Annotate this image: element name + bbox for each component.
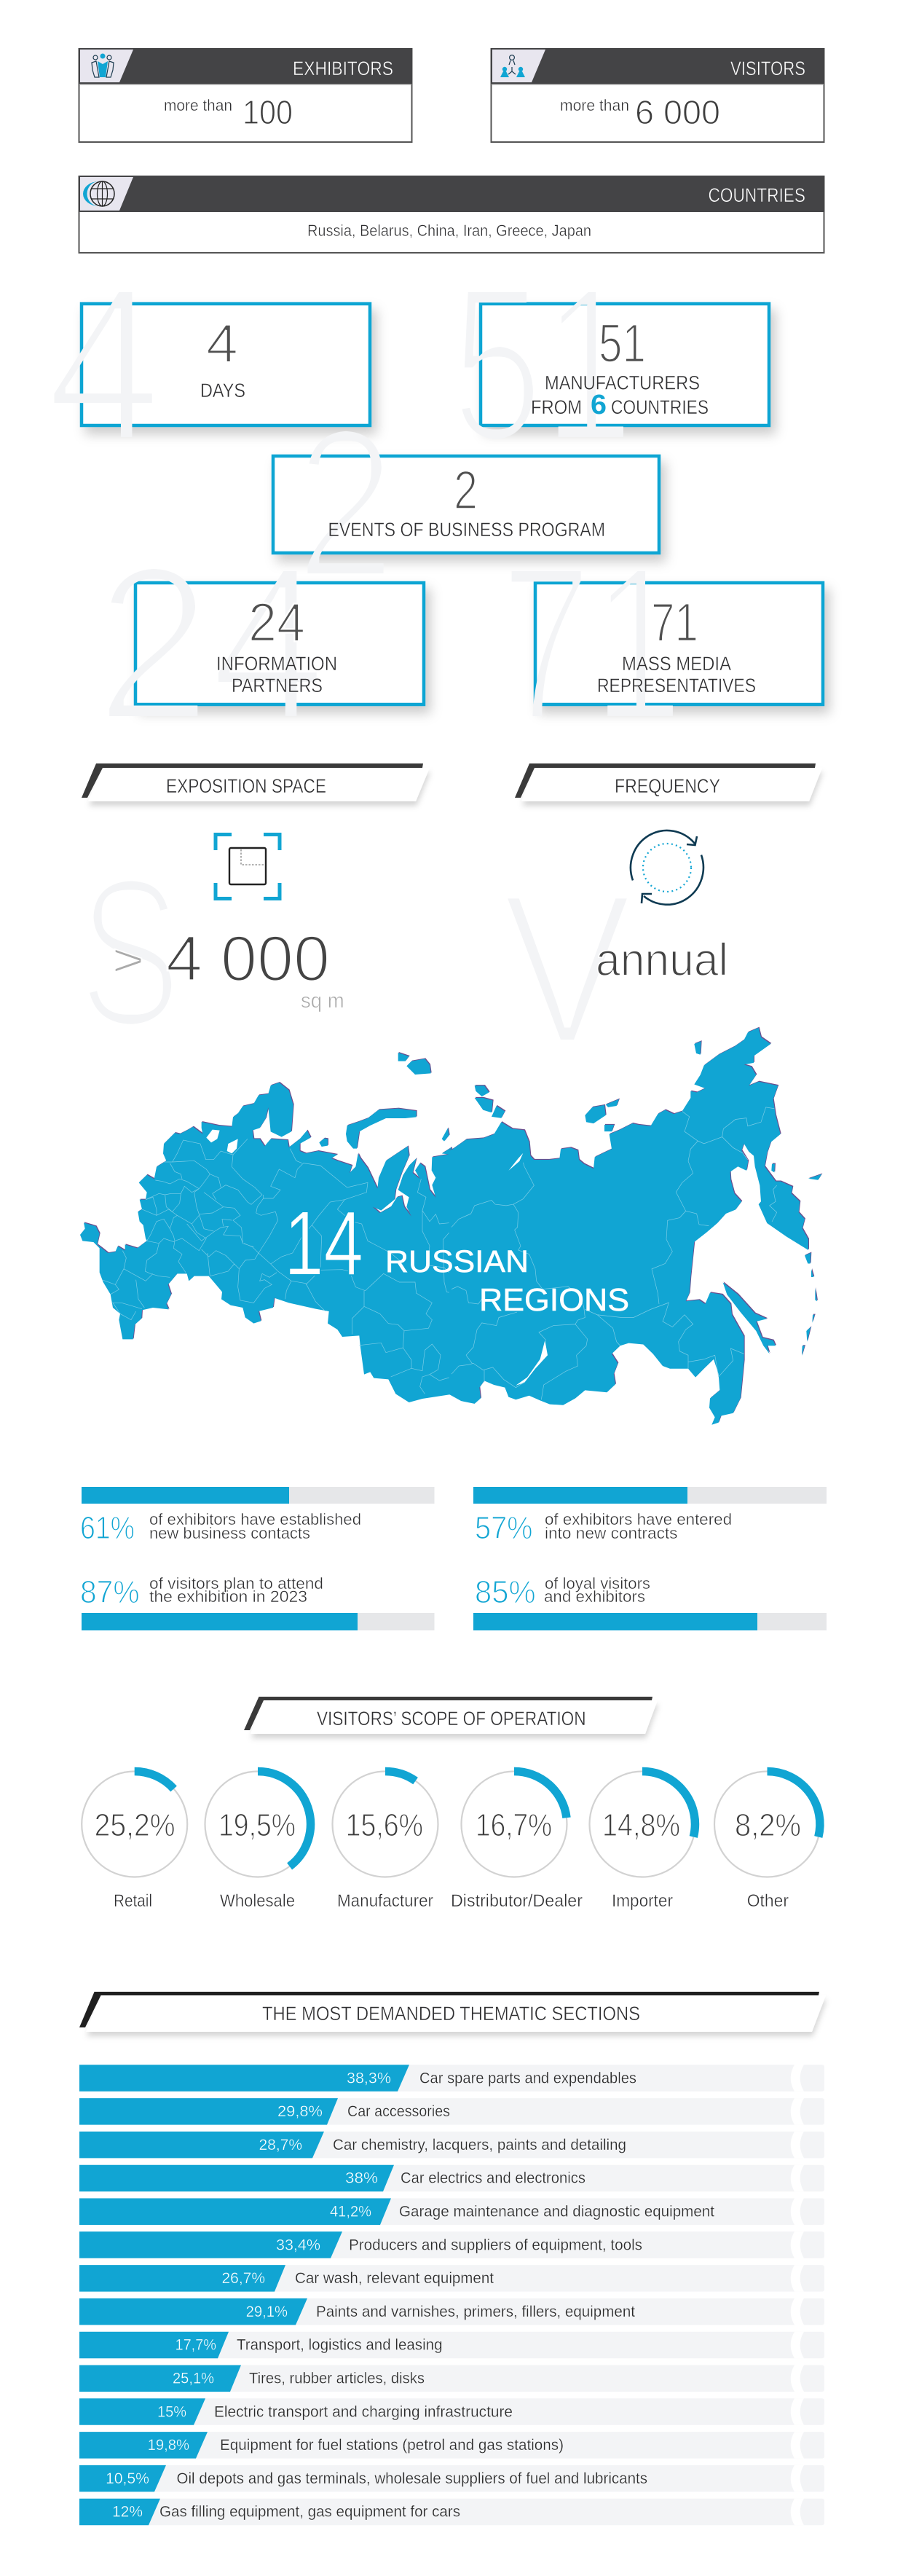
panel: exhibitors [79,48,412,142]
heading: visitors: VISITORS [730,58,805,79]
text: 14 russian regions: REGIONS [479,1282,629,1318]
stat: 24 partners: 24 [248,592,305,653]
row: car spare parts: 38,3% [347,2070,391,2086]
stat: 71 media: REPRESENTATIVES [597,675,756,696]
heading: exposition space: EXPOSITION SPACE [166,775,326,797]
stat bar: 85%: of loyal visitors [545,1574,650,1593]
stat: 2 events [328,460,605,541]
heading: most demanded thematic sections [79,1992,826,2032]
row: electric transport: 15% [157,2403,186,2420]
stat: 24 partners: INFORMATION [216,653,337,675]
stat bar: 87% [80,1574,434,1630]
row: tires [79,2365,824,2392]
row: transport [79,2332,824,2358]
donut: distributor dealer: 16,7% [476,1807,552,1843]
row: car electrics: 38% [345,2170,378,2187]
stat: 51 manufacturers: 6 [591,390,607,420]
stat: exposition area [112,922,344,1013]
heading: visitors scope of operation: VISITORS’ SCOPE OF OPERATION [317,1708,585,1729]
row: gas filling: Gas filling equipment, gas equipment for cars [159,2504,460,2521]
row: car wash: Car wash, relevant equipment [295,2270,494,2287]
text: 14 russian regions [284,1192,629,1318]
stat: 4 days: 4 [206,313,238,374]
row: car chemistry: Car chemistry, lacquers, paints and detailing [333,2137,626,2153]
row: producers and suppliers: 33,4% [276,2237,320,2253]
row: car accessories [79,2098,824,2125]
donut: wholesale: 19,5% [218,1807,296,1843]
panel: countries [79,176,824,253]
row: oil depots [79,2465,824,2491]
row: garage maintenance: 41,2% [330,2203,371,2220]
icon: globe [80,177,133,211]
row: gas filling [79,2499,824,2525]
stat bar: 61%: 61% [80,1510,135,1546]
stat bar: 57%: 57% [475,1510,533,1546]
donut: retail [82,1772,187,1911]
row: transport: Transport, logistics and leasing [237,2337,443,2354]
row: paints and varnishes [79,2298,824,2325]
row: fuel stations [79,2432,824,2459]
row: oil depots: Oil depots and gas terminals, wholesale suppliers of fuel and lubricants [176,2470,647,2487]
heading: exposition space [82,763,430,801]
stat: 51 manufacturers: FROM [531,396,582,418]
background numerals [47,242,684,1088]
stat: 51 manufacturers: COUNTRIES [611,396,709,418]
row: gas filling: 12% [112,2504,143,2521]
value: visitors count: more than [560,96,629,114]
panel: 4 days [82,304,370,425]
row: car wash [79,2265,824,2292]
stat: annual: annual [596,935,728,986]
row: car electrics [79,2165,824,2191]
value: exhibitors count: more than [164,96,232,114]
row: car spare parts: Car spare parts and expendables [419,2070,636,2086]
heading: countries: COUNTRIES [708,184,805,206]
stat: 24 partners [216,592,337,696]
stat: 2 events: 2 [454,460,478,521]
background numerals: V [502,850,634,1088]
stat bar: 57% [473,1487,827,1546]
stat bar: 87%: of visitors plan to attend [149,1574,323,1593]
donut: manufacturer [332,1772,438,1911]
row: transport: 17,7% [175,2337,216,2354]
heading: visitors scope of operation [244,1697,658,1734]
text: country list: Russia, Belarus, China, Iran, Greece, Japan [307,221,591,240]
stat: 71 media: 71 [651,592,698,653]
heading: frequency [515,763,822,801]
row: car wash: 26,7% [221,2270,265,2287]
row: fuel stations: Equipment for fuel stations (petrol and gas stations) [220,2437,564,2454]
row: oil depots: 10,5% [106,2470,149,2487]
row: tires: Tires, rubber articles, disks [249,2371,425,2387]
row: producers and suppliers: Producers and suppliers of equipment, tools [349,2237,642,2253]
stat: 71 media: MASS MEDIA [622,653,731,675]
row: garage maintenance: Garage maintenance and diagnostic equipment [399,2203,714,2220]
icon: annual cycle [631,830,703,905]
stat bar: 87%: 87% [80,1574,140,1610]
value: exhibitors count: 100 [242,93,293,131]
row: fuel stations: 19,8% [148,2437,189,2454]
background numerals: 71 [500,521,684,766]
donut: manufacturer: 15,6% [346,1807,423,1843]
donut: other: Other [747,1891,789,1911]
panel: 24 partners [135,583,424,704]
background numerals: S [79,835,181,1070]
donut: retail: 25,2% [95,1807,175,1843]
stat: exposition area: > [112,935,144,986]
donut: wholesale [205,1772,310,1911]
stat: 24 partners: PARTNERS [232,675,323,696]
background numerals: 51 [452,242,634,487]
icon: area frame [216,835,280,899]
heading: most demanded thematic sections: THE MOST DEMANDED THEMATIC SECTIONS [262,2003,640,2025]
donut: manufacturer: Manufacturer [337,1891,433,1911]
stat bar: 85%: 85% [475,1574,536,1610]
panel: 2 events [273,456,659,553]
donut: retail: Retail [114,1891,152,1911]
chart: thematic sections [79,2065,824,2525]
stat: 2 events: EVENTS OF BUSINESS PROGRAM [328,519,605,541]
donut: distributor dealer [451,1772,583,1911]
value: visitors count: 6 000 [635,93,720,131]
row: car electrics: Car electrics and electronics [401,2170,585,2187]
background numerals: 4 [47,242,161,487]
row: paints and varnishes: 29,1% [246,2304,288,2320]
row: car chemistry: 28,7% [259,2137,302,2153]
value: exhibitors count [164,93,293,131]
stat: exposition area: 4 000 [166,922,330,994]
donut: other: 8,2% [735,1807,801,1843]
row: electric transport: Electric transport and charging infrastructure [214,2403,513,2420]
stat bar: 61%: new business contacts [149,1524,310,1542]
donut: distributor dealer: Distributor/Dealer [451,1891,583,1911]
row: garage maintenance [79,2199,824,2225]
donut: importer [590,1772,695,1911]
heading: frequency: FREQUENCY [615,775,720,797]
row: paints and varnishes: Paints and varnishes, primers, fillers, equipment [316,2304,635,2320]
stat: 51 manufacturers: 51 [599,313,646,374]
text: 14 russian regions: RUSSIAN [385,1244,529,1279]
icon: exhibitors people [80,50,133,82]
donut: importer: Importer [612,1891,673,1911]
stat: 4 days: DAYS [200,380,245,401]
background numerals: 2 [296,385,395,621]
donut: wholesale: Wholesale [220,1891,295,1911]
stat bar: 61% [80,1487,434,1546]
row: producers and suppliers [79,2231,824,2258]
row: car accessories: Car accessories [347,2103,450,2120]
value: visitors count [560,93,720,131]
panel: 71 media [535,583,823,704]
donut: importer: 14,8% [602,1807,680,1843]
text: 14 russian regions: 14 [284,1192,363,1295]
panel: 51 manufacturers [481,304,769,425]
stat: 4 days [200,313,245,401]
background numerals: 24 [96,521,326,766]
stat: 51 manufacturers: MANUFACTURERS [545,372,700,393]
heading: exhibitors: EXHIBITORS [293,58,393,79]
icon: visitors network [492,50,545,82]
map: russia regions [80,1027,822,1425]
row: tires: 25,1% [173,2371,214,2387]
row: electric transport [79,2398,824,2425]
panel: visitors [491,48,824,142]
row: car accessories: 29,8% [277,2103,323,2120]
stat bar: 87%: the exhibition in 2023 [149,1587,307,1606]
row: car spare parts [79,2065,824,2092]
donut: other [714,1772,820,1911]
stat bar: 85% [473,1574,827,1630]
stat bar: 57%: of exhibitors have entered [545,1510,732,1528]
stat bar: 61%: of exhibitors have established [149,1510,361,1528]
stat: 71 media [597,592,756,696]
stat bar: 85%: and exhibitors [544,1587,645,1606]
stat: 51 manufacturers [531,313,709,420]
row: car chemistry [79,2132,824,2158]
stat bar: 57%: into new contracts [545,1524,677,1542]
stat: exposition area: sq m [301,989,344,1013]
